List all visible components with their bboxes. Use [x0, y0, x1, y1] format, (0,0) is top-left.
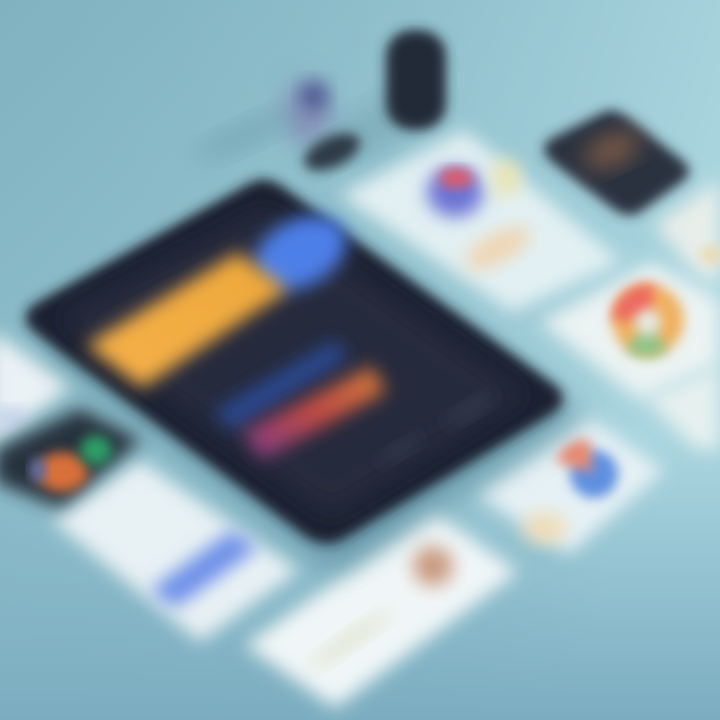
speaker device top — [309, 30, 446, 176]
tablet — [25, 179, 563, 544]
card right lower edge — [645, 365, 720, 450]
small gadgets top — [190, 80, 366, 178]
tablet red bar — [242, 366, 386, 460]
phone top right — [544, 110, 689, 215]
tablet dim marks — [444, 391, 496, 429]
tablet blue tile — [240, 200, 360, 306]
tablet shadow — [40, 215, 585, 570]
card lower right — [476, 418, 664, 554]
card bottom left — [52, 460, 300, 642]
card far right top — [655, 180, 720, 285]
phone left with donut — [0, 408, 142, 508]
tablet orange panel — [86, 252, 288, 388]
card upper center — [340, 130, 622, 312]
card left edge — [0, 330, 72, 448]
card donut right — [540, 262, 720, 400]
card bottom center — [245, 512, 518, 708]
tablet blue bar — [214, 340, 348, 430]
